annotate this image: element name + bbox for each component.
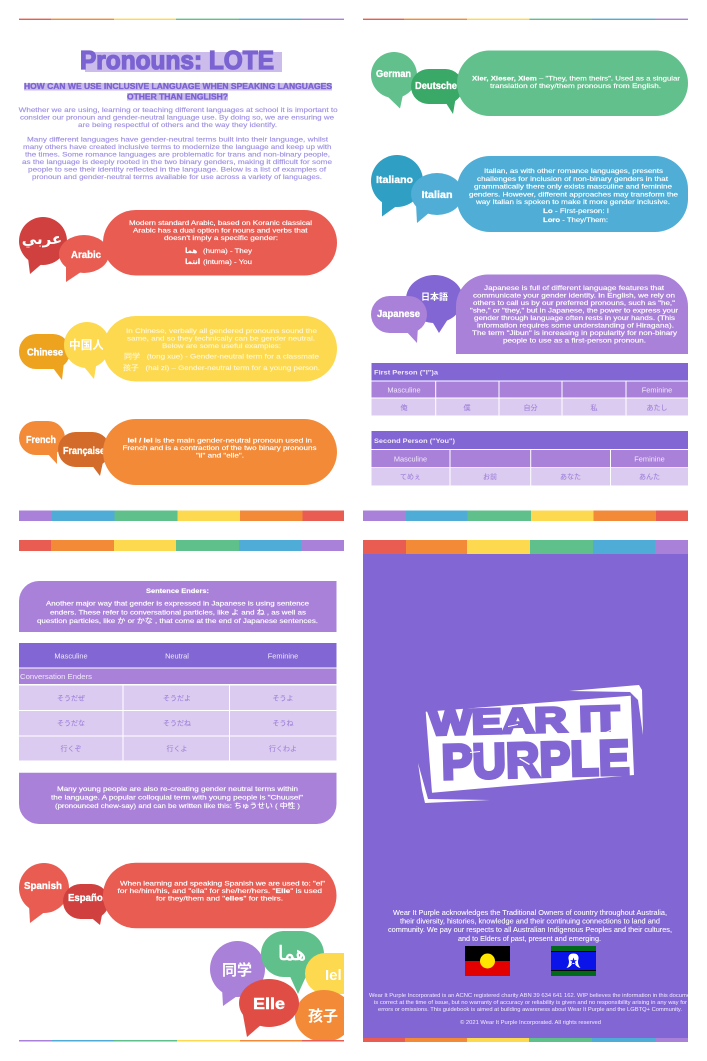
intro text: as the language is deeply rooted in the two binary genders, making it difficult for some: [22, 159, 332, 166]
table: conversation enders: 行くわよ: [269, 744, 297, 753]
icon: cluster of multilingual speech bubbles: [210, 931, 344, 1040]
icon: cluster of multilingual speech bubbles: هما: [278, 943, 306, 965]
table: conversation enders: そうよ: [272, 694, 294, 702]
subheading: OTHER THAN ENGLISH?: [127, 92, 228, 102]
panel: Arabic description: (intuma) - You: [203, 259, 252, 266]
panel: Italian description: [457, 156, 688, 232]
panel: German description: translation of they/them pronouns from English.: [490, 83, 661, 90]
panel: Chinese description: 同学 (tong xue) - Gender-neutral term for a classmate: [124, 352, 319, 360]
intro text: are being respectful of others and the way they identify.: [78, 122, 277, 129]
panel: Spanish description: for he/him/his, and "ella" for she/her/hers. " Elle " is used: [118, 888, 322, 895]
panel: Spanish description: When learning and speaking Spanish we are used to: "el": [120, 881, 326, 888]
icon: Japanese speech bubbles: [371, 275, 463, 343]
purple background: [363, 554, 688, 1038]
panel: Arabic description: [103, 210, 337, 276]
panel: Chuusei note: Many young people are also re-creating gender neutral terms within: [57, 786, 298, 793]
table: second person pronouns: あなた: [560, 473, 581, 481]
icon: Spanish speech bubbles: [19, 863, 109, 925]
icon: Arabic speech bubbles: [19, 217, 109, 282]
icon: German speech bubbles: [371, 52, 463, 114]
panel: Japanese description: Japanese is full of different language features that: [484, 285, 664, 292]
bottom rainbow rule page 3: [19, 1040, 344, 1042]
panel: Arabic description: (huma) - They: [203, 248, 253, 255]
panel: sentence enders text: Another major way that gender is expressed in Japanese is using sentence: [46, 601, 309, 608]
legal fine print: © 2021 Wear It Purple Incorporated. All rights reserved: [460, 1019, 601, 1026]
table: second person pronouns: お前: [483, 472, 497, 481]
logo: Wear It Purple: [418, 685, 643, 803]
table: conversation enders: そうだね: [163, 720, 191, 728]
panel: Japanese description: gender through language often rests in your hands. (This: [474, 315, 676, 322]
icon: Italian speech bubbles: [371, 155, 463, 223]
icon: Chinese speech bubbles: 中国人: [69, 338, 104, 352]
table: conversation enders: Feminine: [268, 652, 298, 661]
panel: page 3 sentence enders and Spanish: [19, 540, 365, 1042]
panel: Italian description: Italian, as with other romance languages, presents: [484, 168, 664, 175]
table: second person pronouns: Feminine: [634, 454, 665, 464]
icon: Italian speech bubbles: Italiano: [376, 174, 413, 186]
panel: sentence enders text: question particles, like か or かな , that come at the end of Japanese sentences.: [37, 617, 318, 625]
panel: Chuusei note: [19, 773, 336, 824]
intro text: Many different languages have gender-neutral terms built into their language, whilst: [27, 137, 328, 144]
intro text: the times. Some romance languages are problematic for trans and non-binary people,: [25, 152, 330, 159]
acknowledgement of country: community. We pay our respects to all Australian Indigenous Peoples and their cultures,: [388, 925, 672, 934]
intro text: pronoun and gender-neutral terms available for use across a variety of languages.: [32, 174, 322, 181]
panel: Japanese description: [456, 274, 688, 354]
panel: Chinese description: same, and so they technically can be gender neutral.: [127, 336, 315, 342]
top rainbow bar page 3: [19, 540, 344, 551]
panel: Chinese description: 孩子 (hai zi) – Gender-neutral term for a young person.: [123, 363, 320, 372]
subheading: [24, 81, 332, 102]
panel: French description: "il" and "elle".: [196, 452, 244, 460]
legal fine print: is correct at the time of issue, but no warranty of accuracy or reliability is given and no responsibility arising in any way for: [374, 1000, 687, 1006]
panel: Arabic description: انتما: [185, 259, 200, 266]
panel: Italian description: challenges for inclusion of non-binary genders in that: [477, 176, 668, 183]
intro text: people to see their identity reflected in the language. Below is a list of examples of: [28, 167, 326, 174]
bottom rainbow bar page 2: [363, 510, 688, 521]
acknowledgement of country: [388, 908, 672, 943]
table: conversation enders: [19, 643, 336, 760]
icon: German speech bubbles: German: [376, 68, 411, 80]
panel: French description: French and is a contraction of the two binary pronouns: [122, 445, 317, 452]
table: first person pronouns: あたし: [646, 404, 668, 412]
table: second person pronouns: てめぇ: [400, 473, 421, 481]
icon: Spanish speech bubbles: Spanish: [24, 880, 62, 892]
table: conversation enders: 行くよ: [166, 744, 188, 753]
icon: French speech bubbles: [19, 421, 110, 476]
icon: Torres Strait Islander flag: [551, 946, 596, 976]
panel: Chinese description: [103, 316, 337, 382]
icon: French speech bubbles: French: [26, 434, 56, 446]
top rainbow bar page 4: [363, 540, 688, 554]
panel: Arabic description: doesn't imply a specific gender:: [164, 235, 278, 242]
bottom rainbow bar page 4: [363, 1038, 688, 1042]
intro text: [19, 107, 338, 181]
panel: French description: [103, 419, 337, 485]
legal fine print: Wear It Purple Incorporated is an ACNC registered charity ABN 39 634 641 162. WIP believes the information in this document: [369, 993, 696, 999]
panel: Italian description: grammatically there only exists masculine and feminine: [474, 184, 672, 190]
panel: Japanese description: "she," or "they," but in Japanese, the power to express your: [470, 308, 679, 314]
panel: Japanese description: communicate your gender identity. In English, we rely on: [473, 292, 675, 300]
table: conversation enders: Conversation Enders: [20, 672, 92, 681]
panel: German description: Xier, Xieser, Xiem – "They, them theirs". Used as a singular: [472, 76, 681, 82]
logo: Wear It Purple: PURPLE: [441, 731, 630, 790]
table: conversation enders: そうだぜ: [57, 694, 85, 702]
icon: Japanese speech bubbles: Japanese: [377, 308, 420, 320]
table: conversation enders: そうだよ: [163, 694, 191, 702]
top rainbow rule page 2: [363, 19, 688, 20]
panel: sentence enders text: [19, 581, 336, 632]
table: conversation enders: そうね: [272, 720, 294, 728]
panel: Spanish description: for they/them and " elles " for theirs.: [156, 896, 283, 903]
panel: Arabic description: Modern standard Arabic, based on Koranic classical: [129, 220, 313, 227]
intro text: Whether we are using, learning or teaching different languages at school it is important to: [19, 107, 338, 114]
icon: Arabic speech bubbles: عربي: [22, 231, 62, 248]
panel: page 2 German Italian Japanese: [363, 19, 688, 521]
table: first person pronouns: Feminine: [642, 386, 672, 394]
table: conversation enders: 行くぞ: [60, 744, 82, 753]
table: conversation enders: Neutral: [165, 652, 189, 661]
legal fine print: [369, 993, 696, 1026]
icon: Aboriginal flag: [465, 946, 510, 976]
panel: Arabic description: هما: [185, 248, 197, 255]
table: first person pronouns: 僕: [464, 403, 470, 412]
icon: Italian speech bubbles: Italian: [422, 189, 452, 201]
icon: Japanese speech bubbles: 日本語: [421, 291, 448, 302]
table: first person pronouns: 私: [590, 403, 598, 412]
table: second person pronouns: Masculine: [394, 454, 427, 464]
icon: Arabic speech bubbles: Arabic: [71, 249, 101, 261]
acknowledgement of country: Wear It Purple acknowledges the Traditional Owners of country throughout Australia,: [393, 908, 667, 917]
icon: Spanish speech bubbles: Español: [68, 892, 106, 904]
subheading: HOW CAN WE USE INCLUSIVE LANGUAGE WHEN SPEAKING LANGUAGES: [24, 81, 332, 91]
table: first person pronouns: 自分: [524, 403, 538, 412]
panel: Italian description: Lo - First-person: I: [543, 208, 609, 215]
panel: Japanese description: others to call us by our preferred pronouns, such as "he,": [473, 300, 676, 307]
table: first person pronouns: 俺: [400, 403, 408, 412]
logo: Wear It Purple: WEAR IT: [429, 699, 620, 743]
panel: Spanish description: [103, 863, 336, 928]
panel: Chinese description: In Chinese, verbally all gendered pronouns sound the: [126, 328, 317, 335]
panel: Japanese description: information requires some understanding of Hiragana).: [477, 322, 674, 330]
table: first person pronouns: [372, 363, 688, 416]
table: first person pronouns: Masculine: [387, 386, 421, 394]
table: conversation enders: Masculine: [54, 652, 88, 661]
legal fine print: errors or omissions. This guidebook is aimed at building awareness about Wear It Purple and the LGBTQ+ Community.: [378, 1007, 682, 1013]
icon: cluster of multilingual speech bubbles: 同学: [222, 961, 252, 979]
panel: Japanese description: The term "Jibun" is increasing in popularity for non-binary: [472, 330, 678, 337]
panel: French description: Iel / Iel is the main gender-neutral pronoun used in: [128, 438, 312, 444]
panel: Chuusei note: the language. A popular colloquial term with young people is "Chuusei": [51, 794, 304, 802]
panel: German description: [457, 50, 688, 116]
panel: sentence enders text: Sentence Enders:: [146, 588, 209, 595]
icon: Chinese speech bubbles: [19, 322, 110, 380]
panel: Italian description: genders. However, different approaches may transform the: [469, 191, 678, 198]
icon: cluster of multilingual speech bubbles: Iel: [325, 967, 342, 984]
top rainbow rule page 1: [19, 19, 344, 20]
intro text: consider our pronoun and gender-neutral language use. By doing so, we are ensuring we: [20, 114, 334, 122]
bottom rainbow bar page 1: [19, 510, 344, 521]
icon: Chinese speech bubbles: Chinese: [27, 346, 63, 358]
acknowledgement of country: and to Elders of past, present and emerging.: [458, 934, 601, 943]
panel: Arabic description: Arabic has a dual option for nouns and verbs that: [133, 228, 308, 234]
title: Pronouns: LOTE: [80, 45, 274, 75]
panel: sentence enders text: enders. These refer to conversational particles, like よ and ね , as well as: [50, 608, 307, 616]
icon: German speech bubbles: Deutsche: [415, 80, 457, 92]
icon: cluster of multilingual speech bubbles: Elle: [253, 996, 285, 1013]
panel: Chinese description: Below are some useful examples:: [162, 343, 281, 350]
intro text: many others have created inclusive terms to modernize the language and keep up with: [23, 144, 332, 151]
panel: Italian description: Loro - They/Them:: [543, 217, 608, 224]
table: second person pronouns: Second Person ("You"): [374, 438, 455, 445]
table: conversation enders: そうだな: [57, 720, 85, 728]
panel: Chuusei note: (pronounced chew-say) and can be written like this: ちゅうせい ( 中性 ): [55, 801, 300, 810]
panel: page 1 language introduction: [19, 19, 344, 521]
table: second person pronouns: [372, 431, 688, 486]
icon: cluster of multilingual speech bubbles: 孩子: [308, 1007, 338, 1025]
table: second person pronouns: あんた: [639, 473, 660, 481]
panel: Italian description: way Italian is spoken to make it more gender inclusive.: [475, 199, 670, 206]
icon: French speech bubbles: Française: [63, 445, 105, 457]
panel: page 4 back cover: [363, 540, 696, 1042]
table: first person pronouns: First Person ("I")a: [374, 370, 438, 377]
panel: Japanese description: people to use as a first-person pronoun.: [503, 338, 646, 344]
acknowledgement of country: their diversity, histories, knowledge and their continuing connections to land and: [400, 916, 660, 926]
